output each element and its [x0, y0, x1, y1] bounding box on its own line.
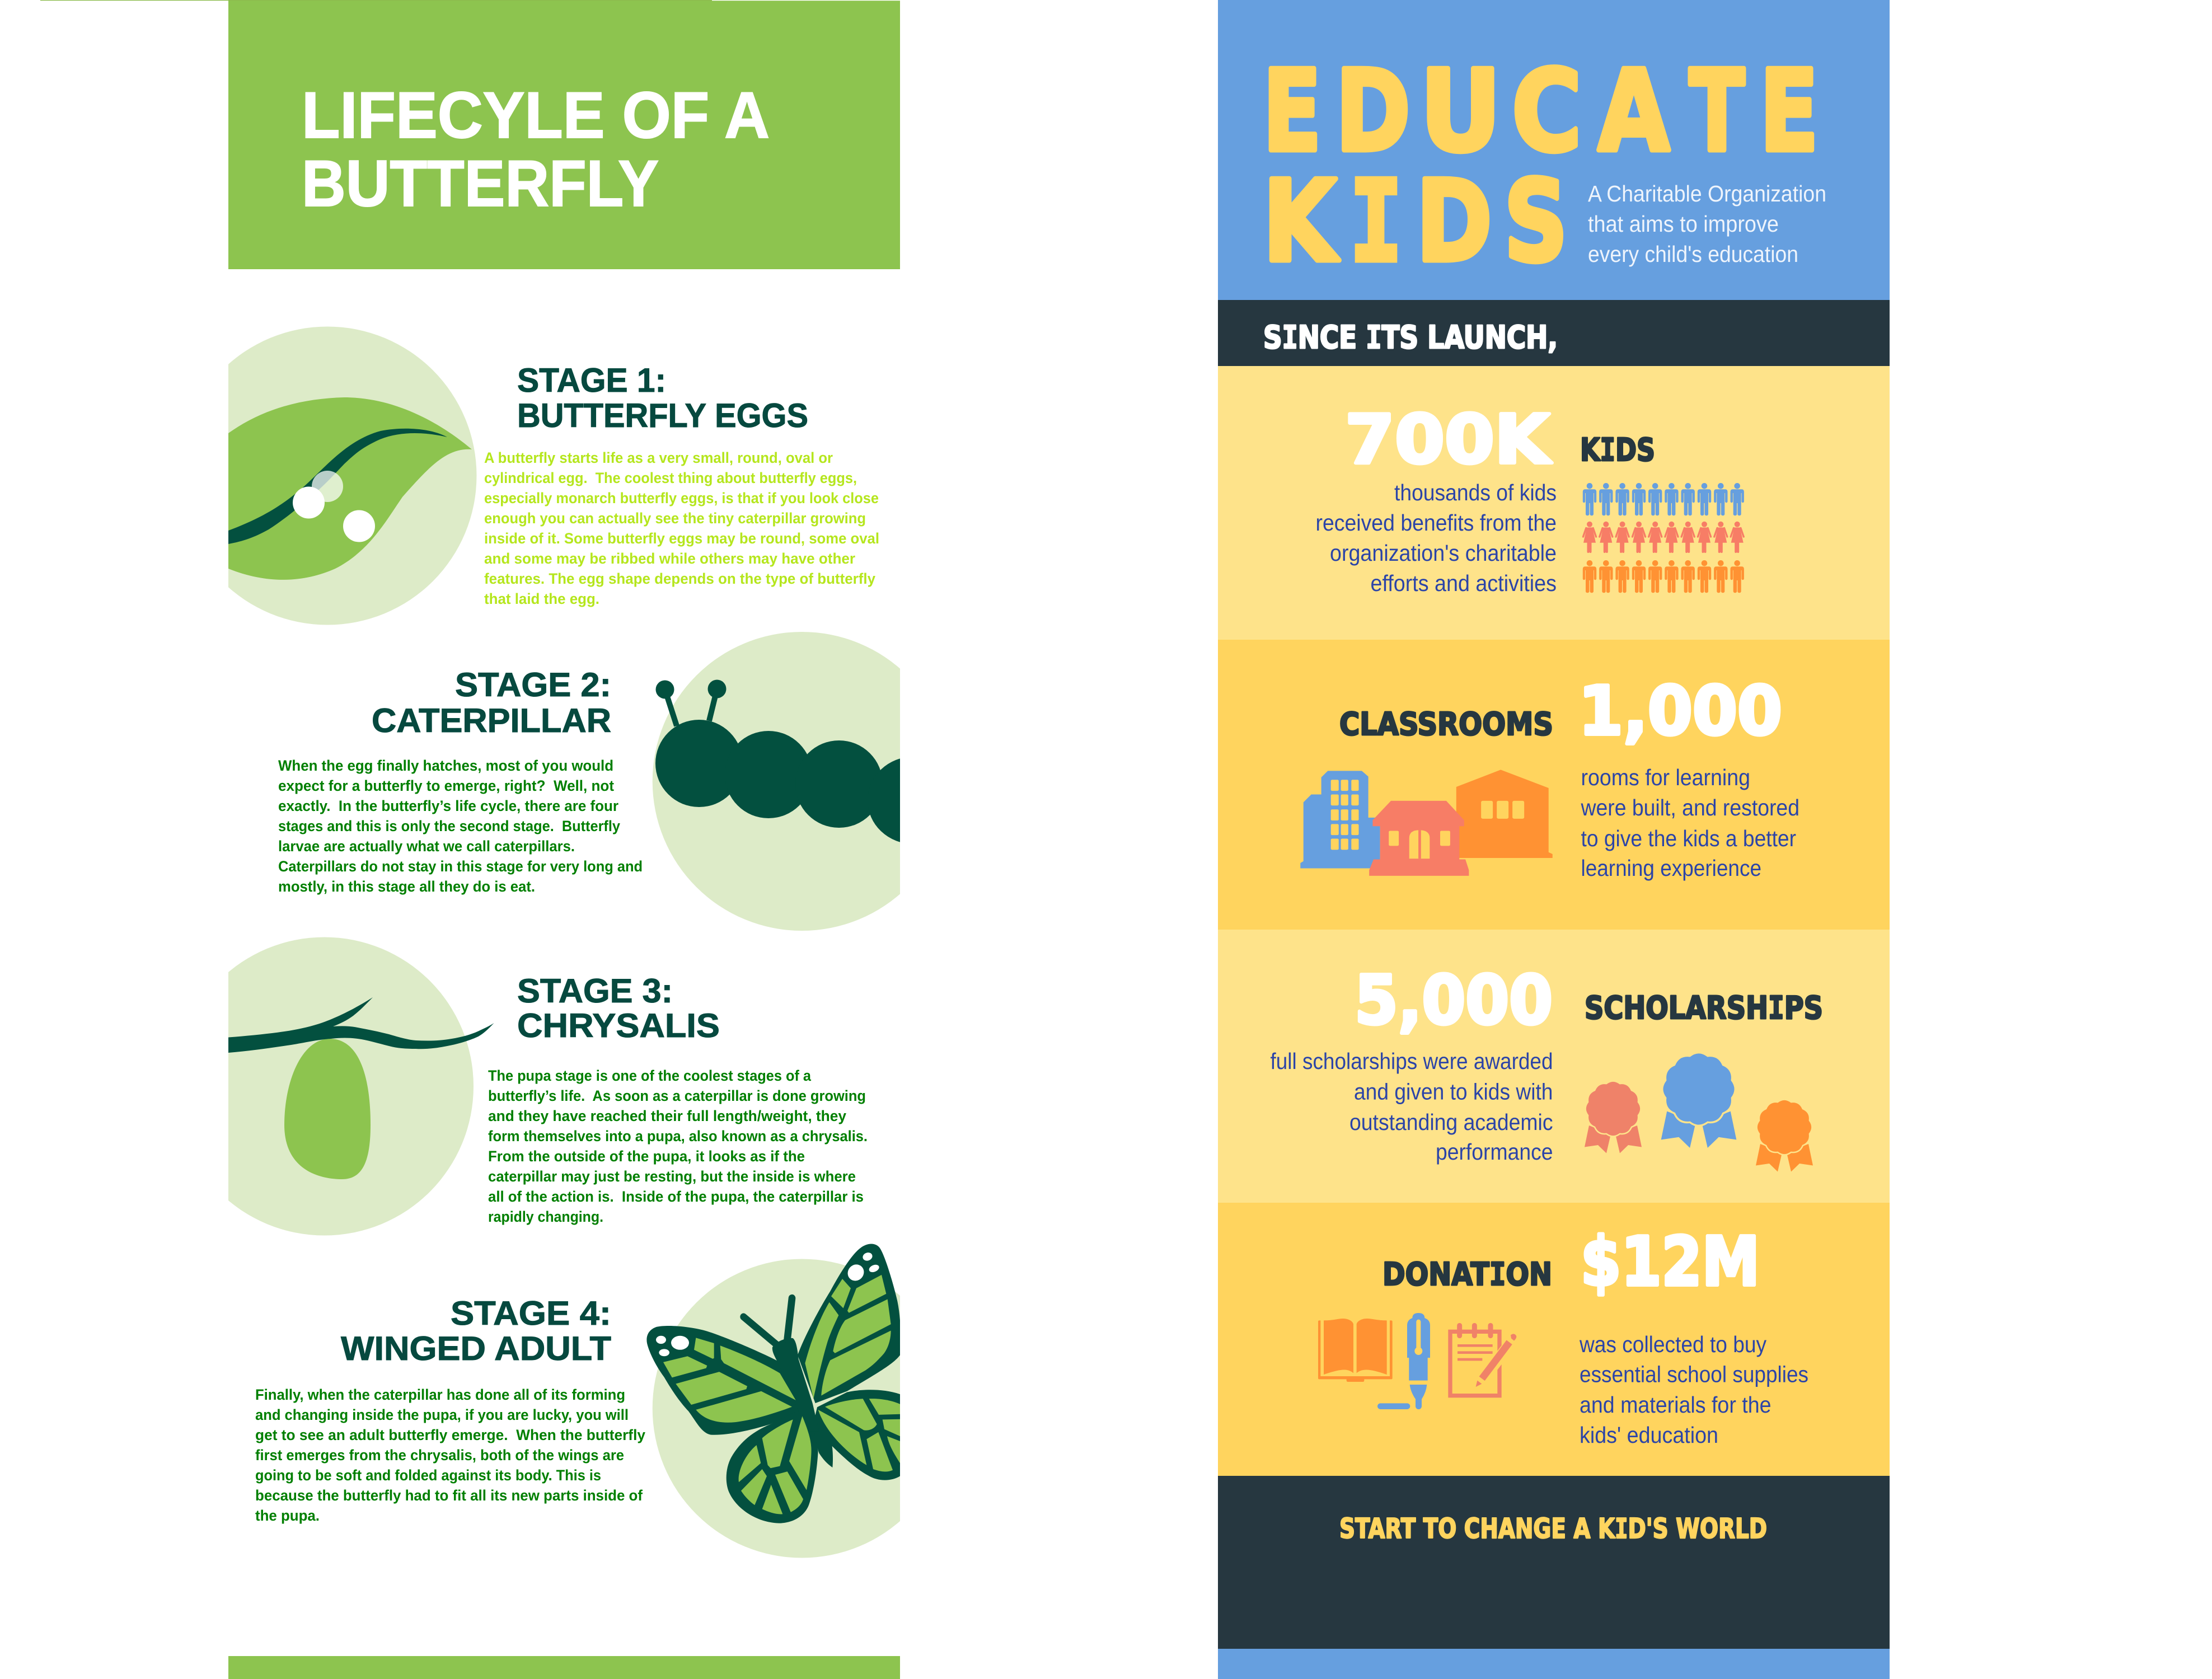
heading: stage 1: STAGE 1: — [517, 362, 666, 399]
heading: stage 4: STAGE 4: — [451, 1295, 611, 1332]
title: kids: D — [1416, 157, 1492, 287]
title: kids: S — [1504, 157, 1568, 287]
title: kids — [1263, 157, 1568, 287]
text: stage 1 description: that laid the egg. — [484, 590, 599, 607]
footer band — [228, 1656, 900, 1679]
text: stage 3 description: all of the action is. Inside of the pupa, the caterpillar is — [488, 1188, 864, 1205]
text: stage 4 description — [255, 1386, 645, 1524]
top edge strip — [40, 0, 712, 1]
text: stage 1 description: enough you can actually see the tiny caterpillar growing — [484, 510, 866, 527]
text: stage 4 description: because the butterfly had to fit all its new parts inside of — [255, 1487, 643, 1504]
title: educate: U — [1420, 46, 1501, 177]
title: educate: T — [1689, 46, 1745, 177]
illustration: butterfly — [646, 1244, 900, 1558]
label: classrooms: CLASSROOMS — [1339, 706, 1553, 743]
title: LIFECYLE OF A — [302, 78, 770, 152]
text: stage 1 description: cylindrical egg. The coolest thing about butterfly eggs, — [484, 470, 857, 486]
heading: stage 2: STAGE 2: — [455, 666, 611, 704]
illustration: leaf with eggs — [228, 327, 477, 625]
subtitle — [1588, 181, 1826, 267]
text: scholarships description: outstanding academic — [1349, 1109, 1553, 1135]
text: classrooms description: learning experience — [1581, 855, 1761, 881]
subtitle: every child's education — [1588, 241, 1798, 267]
title: BUTTERFLY — [302, 147, 659, 220]
heading: stage 3: STAGE 3: — [517, 972, 673, 1010]
text: donation description: essential school supplies — [1580, 1361, 1808, 1387]
heading: stage 4: WINGED ADULT — [341, 1330, 611, 1367]
text: classrooms description — [1581, 765, 1799, 881]
text: stage 2 description: expect for a butterfly to emerge, right? Well, not — [278, 777, 614, 794]
icon: blue medal — [1661, 1053, 1736, 1148]
text: donation description — [1579, 1331, 1808, 1448]
text: stage 3 description: caterpillar may just be resting, but the inside is where — [488, 1168, 856, 1185]
text: kids description: received benefits from the — [1315, 510, 1557, 536]
section: kids — [1218, 366, 1890, 640]
text: classrooms description: to give the kids a better — [1581, 826, 1796, 851]
text: classrooms description: were built, and restored — [1581, 795, 1799, 820]
text: stage 4 description: going to be soft and folded against its body. This is — [255, 1467, 601, 1484]
text: donation description: was collected to buy — [1579, 1331, 1766, 1357]
banner: since its launch — [1218, 300, 1890, 367]
banner: since its launch: SINCE ITS LAUNCH, — [1263, 320, 1558, 356]
icon: pen — [1377, 1313, 1430, 1409]
text: stage 2 description: When the egg finally hatches, most of you would — [278, 757, 613, 774]
text: stage 4 description: first emerges from the chrysalis, both of the wings are — [255, 1447, 624, 1464]
heading: stage 3: CHRYSALIS — [517, 1007, 720, 1044]
section: donation — [1218, 1203, 1890, 1476]
section: classrooms — [1218, 640, 1890, 930]
icon: notepad and pencil — [1450, 1325, 1521, 1396]
title: kids: K — [1263, 157, 1340, 287]
text: stage 2 description — [278, 757, 643, 895]
text: stage 3 description: From the outside of the pupa, it looks as if the — [488, 1148, 805, 1165]
text: stage 1 description: inside of it. Some butterfly eggs may be round, some oval — [484, 530, 879, 547]
icon: coral medal — [1585, 1081, 1642, 1153]
footer band — [1218, 1649, 1890, 1679]
call to action band: START TO CHANGE A KID'S WORLD — [1339, 1513, 1767, 1545]
text: scholarships description: full scholarships were awarded — [1271, 1048, 1553, 1074]
text: classrooms description: rooms for learning — [1581, 765, 1750, 790]
stat: 700K: 700K — [1345, 401, 1552, 479]
text: stage 1 description: A butterfly starts life as a very small, round, oval or — [484, 449, 833, 466]
header background — [1218, 0, 1890, 301]
panel: lifecycle of a butterfly — [40, 0, 959, 1679]
text: stage 3 description: rapidly changing. — [488, 1208, 603, 1225]
text: donation description: kids' education — [1580, 1422, 1718, 1448]
subtitle: A Charitable Organization — [1588, 181, 1826, 207]
text: stage 3 description: The pupa stage is one of the coolest stages of a — [488, 1067, 812, 1084]
text: kids description: organization's charitable — [1330, 540, 1557, 566]
text: stage 4 description: Finally, when the caterpillar has done all of its forming — [255, 1386, 625, 1403]
text: stage 2 description: mostly, in this stage all they do is eat. — [278, 878, 535, 895]
title: educate: E — [1760, 46, 1819, 177]
title: educate: D — [1335, 46, 1410, 177]
stat: 5,000: 5,000 — [1355, 962, 1553, 1040]
heading: stage 1 — [517, 362, 808, 434]
text: stage 1 description: features. The egg shape depends on the type of butterfly — [484, 570, 875, 587]
text: stage 4 description: get to see an adult butterfly emerge. When the butterfly — [255, 1427, 645, 1443]
text: stage 4 description: the pupa. — [255, 1507, 320, 1524]
heading: stage 2 — [372, 666, 611, 739]
text: stage 1 description: and some may be ribbed while others may have other — [484, 550, 855, 567]
icon: orange medal — [1756, 1100, 1813, 1172]
heading: stage 4 — [341, 1295, 611, 1367]
text: scholarships description: performance — [1436, 1139, 1553, 1165]
text: stage 3 description: and they have reached their full length/weight, they — [488, 1108, 846, 1124]
text: kids description: efforts and activities — [1370, 570, 1557, 596]
stat: $12M: $12M — [1581, 1223, 1760, 1301]
icon: school buildings — [1300, 770, 1553, 876]
text: stage 3 description: butterfly’s life. As soon as a caterpillar is done growing — [488, 1087, 866, 1104]
text: kids description: thousands of kids — [1394, 480, 1557, 505]
title: kids: I — [1349, 157, 1403, 287]
text: stage 1 description: especially monarch butterfly eggs, is that if you look close — [484, 490, 879, 506]
text: scholarships description — [1271, 1048, 1553, 1165]
text: stage 1 description — [484, 449, 879, 607]
title: educate: E — [1263, 46, 1321, 177]
heading: stage 3 — [517, 972, 720, 1044]
text: stage 2 description: stages and this is only the second stage. Butterfly — [278, 818, 620, 834]
text: scholarships description: and given to kids with — [1354, 1079, 1553, 1105]
call to action band — [1218, 1476, 1890, 1649]
text: stage 4 description: and changing inside the pupa, if you are lucky, you will — [255, 1406, 629, 1423]
subtitle: that aims to improve — [1588, 211, 1779, 237]
label: kids: KIDS — [1580, 432, 1655, 468]
section: scholarships — [1218, 930, 1890, 1203]
illustration: caterpillar — [653, 632, 900, 931]
text: stage 2 description: exactly. In the butterfly’s life cycle, there are four — [278, 798, 618, 814]
title: educate: C — [1512, 46, 1582, 177]
panel: educate kids — [1218, 0, 1890, 1679]
text: stage 3 description — [488, 1067, 868, 1225]
text: stage 2 description: Caterpillars do not stay in this stage for very long and — [278, 858, 643, 875]
label: donation: DONATION — [1382, 1256, 1552, 1293]
title: educate — [1263, 46, 1819, 177]
title: educate: A — [1598, 46, 1670, 177]
title — [302, 78, 770, 220]
text: stage 2 description: larvae are actually what we call caterpillars. — [278, 838, 575, 855]
top edge white strip — [712, 0, 900, 1]
heading: stage 2: CATERPILLAR — [372, 702, 611, 739]
text: donation description: and materials for the — [1580, 1392, 1771, 1418]
text: stage 3 description: form themselves into a pupa, also known as a chrysalis. — [488, 1128, 868, 1145]
icon: school supplies — [1318, 1313, 1521, 1409]
text: kids description — [1315, 480, 1557, 596]
header band — [228, 0, 900, 269]
icon: open book — [1318, 1319, 1393, 1382]
heading: stage 1: BUTTERFLY EGGS — [517, 397, 808, 434]
label: scholarships: SCHOLARSHIPS — [1585, 990, 1823, 1026]
icon: rows of people — [1583, 483, 1744, 593]
stat: 1,000: 1,000 — [1578, 673, 1782, 751]
illustration: chrysalis on branch — [228, 937, 494, 1236]
